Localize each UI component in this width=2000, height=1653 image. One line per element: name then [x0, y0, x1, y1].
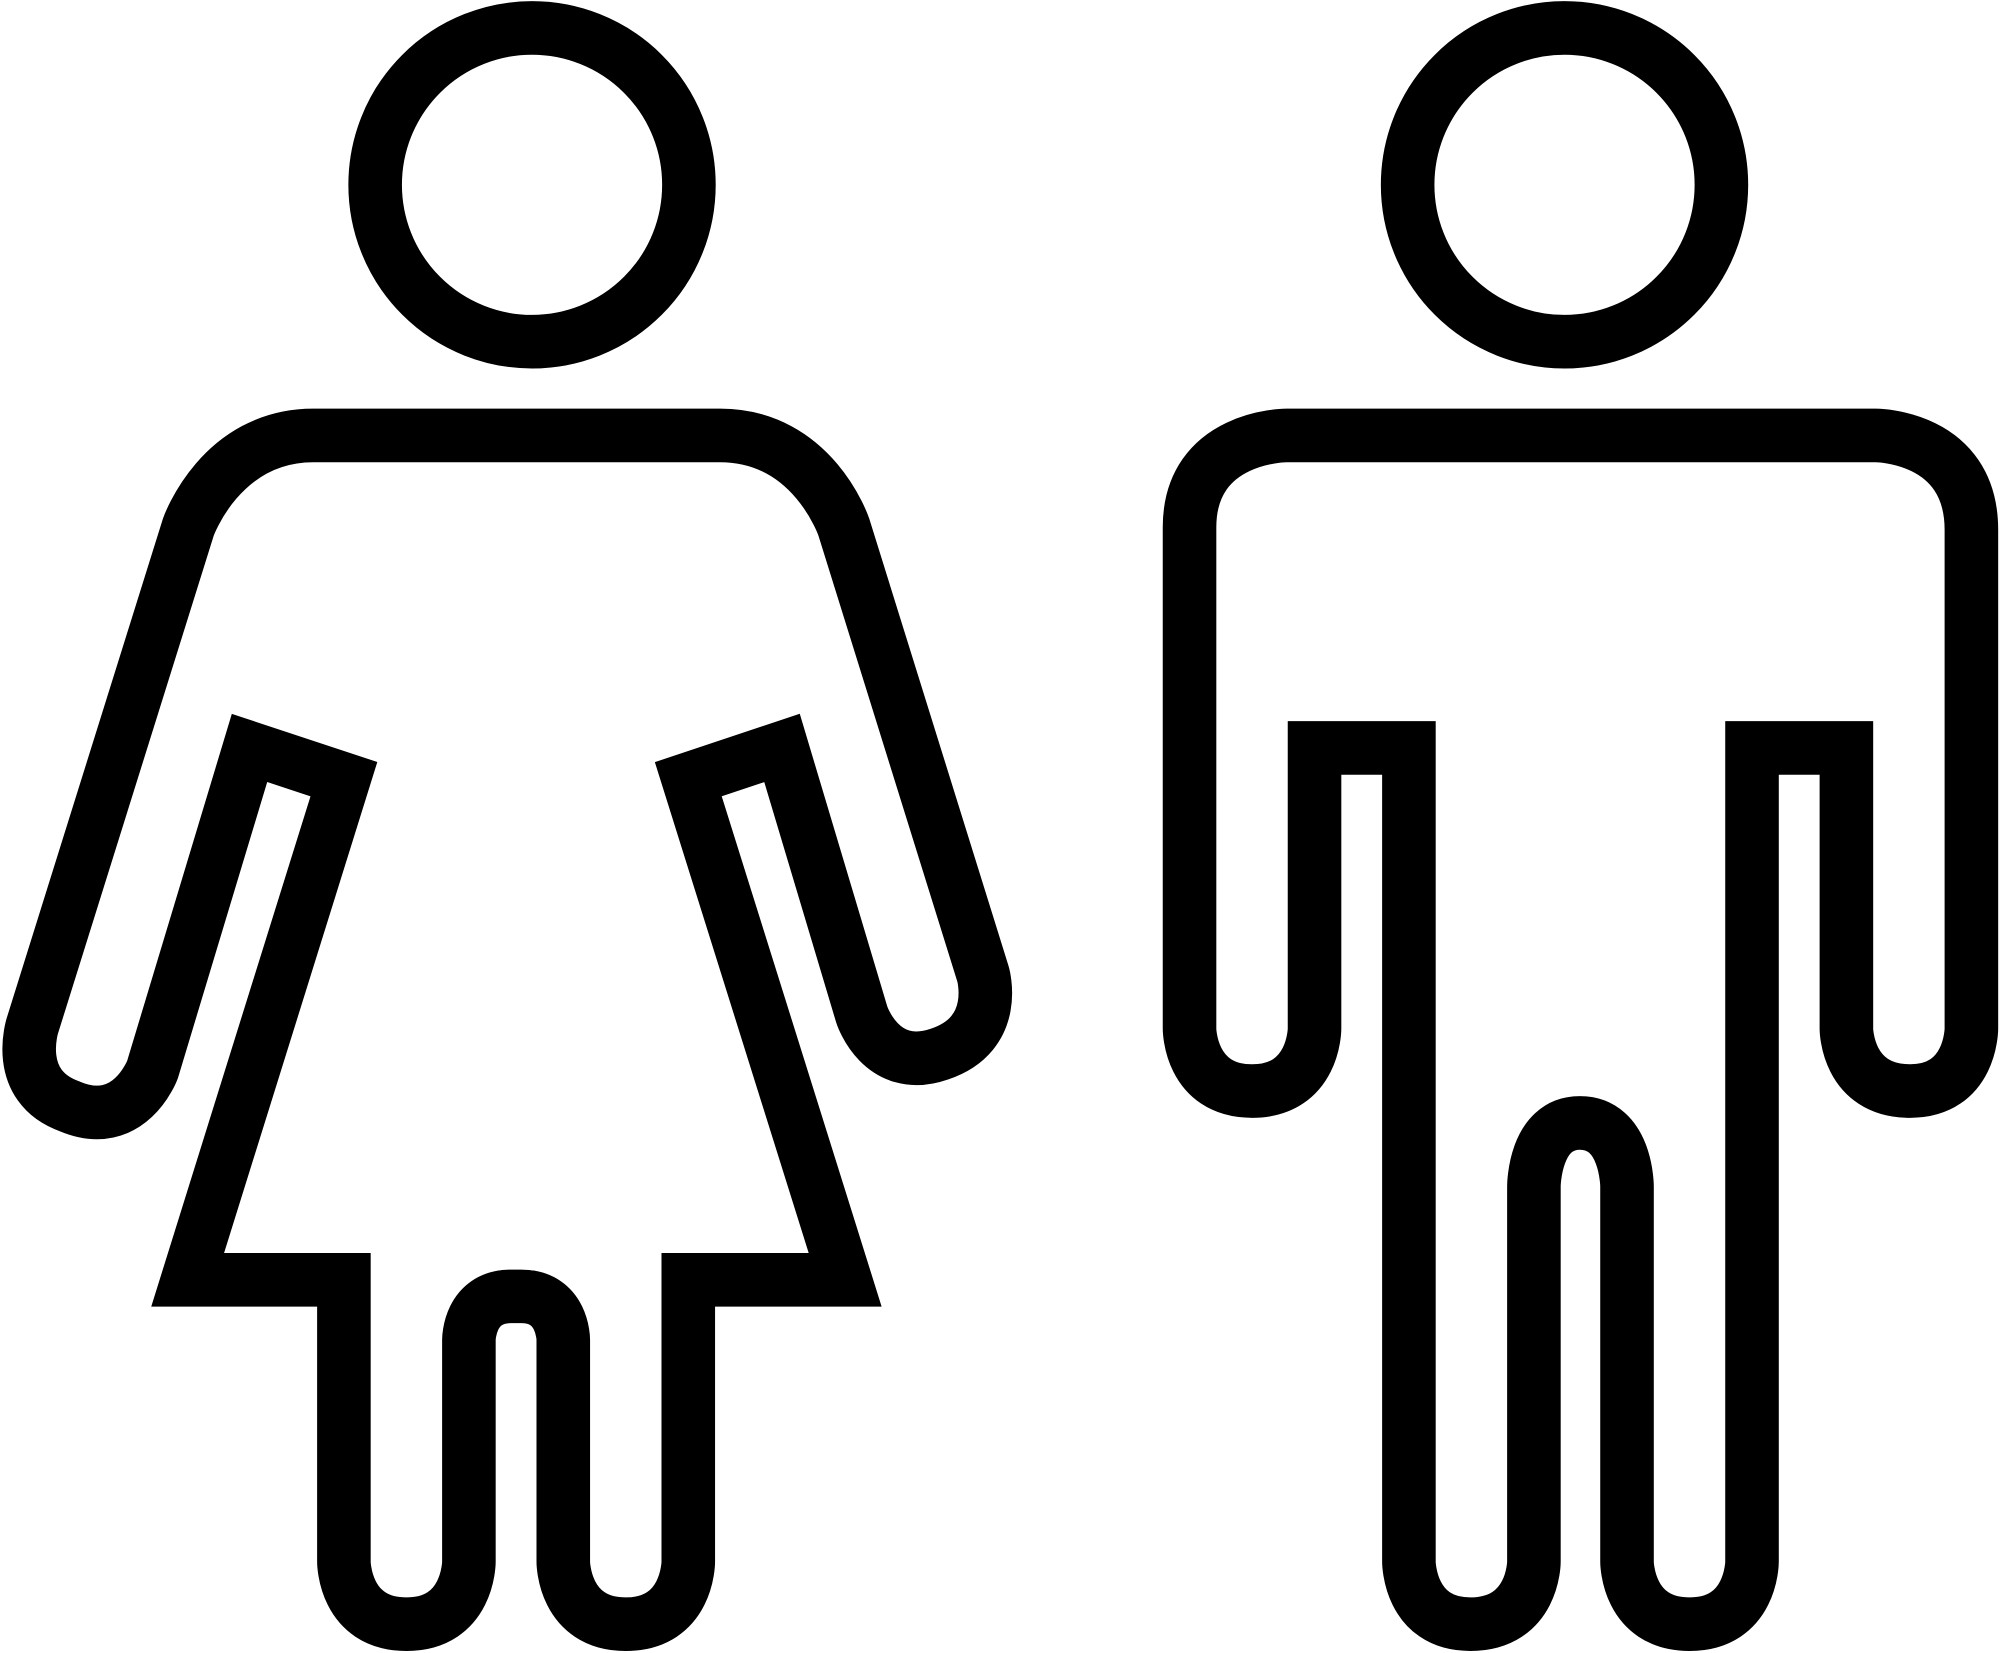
male body outline — [1190, 435, 1971, 1624]
female head — [375, 28, 689, 342]
icon: male figure — [1190, 28, 1971, 1624]
female body outline — [29, 435, 985, 1624]
icon: female figure — [29, 28, 985, 1624]
male head — [1408, 28, 1721, 342]
